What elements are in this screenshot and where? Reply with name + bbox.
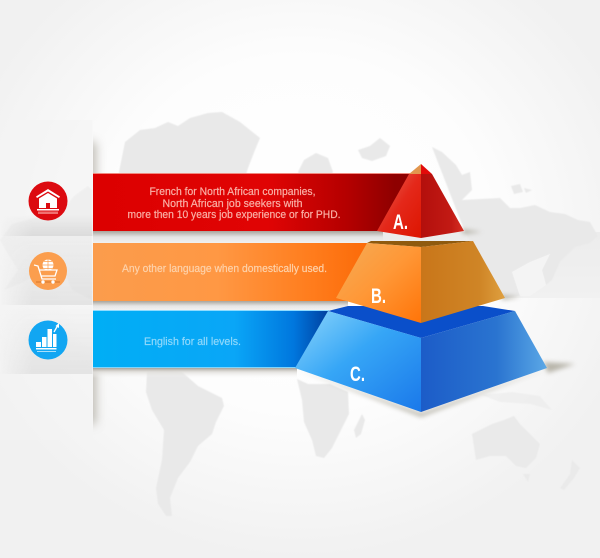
icon: shopping cart with globe (29, 252, 67, 290)
text: English: English for all levels. (144, 336, 241, 348)
lighter sea shape in the strip (512, 254, 550, 296)
text: French: French for North African companies, (149, 186, 315, 198)
label: C: C. (350, 363, 365, 386)
icon: house (28, 182, 68, 220)
label: B: B. (371, 285, 386, 308)
band: orange (93, 243, 368, 301)
icon: growth chart (28, 320, 68, 360)
map: Svalbard (358, 138, 390, 161)
band: red (93, 173, 411, 231)
map: North America slices (133, 231, 300, 310)
map: Iceland (298, 153, 333, 184)
panel shadow on the map (93, 138, 102, 428)
world map (0, 112, 598, 516)
pyramid tier B (336, 241, 505, 323)
map: Madagascar (354, 414, 365, 438)
band: blue (93, 310, 329, 368)
text: French: North African job seekers with (162, 198, 302, 210)
map: Tasmania (523, 474, 530, 482)
map: Southeast Asia islands (482, 392, 552, 410)
text: French: more then 10 years job experience or for PHD. (128, 209, 340, 221)
map: Russian Arctic (432, 147, 598, 298)
map: Alaska (0, 186, 92, 300)
pyramid tier C (295, 306, 547, 412)
map: New Zealand (560, 460, 580, 490)
map: small Arctic islands (511, 184, 532, 194)
map: Africa (297, 379, 349, 458)
pyramid shadows (296, 229, 575, 417)
map: Australia (472, 416, 540, 468)
text: other language: Any other language when domestically used. (122, 263, 327, 275)
panel: left icon column (13, 221, 92, 374)
map: South America (146, 371, 224, 516)
map: Arctic Canada and Greenland (119, 112, 260, 184)
label: A: A. (393, 211, 408, 234)
gap shadows (93, 231, 383, 378)
horizontal strip behind tier B (93, 232, 600, 298)
pyramid tier A (377, 164, 464, 238)
